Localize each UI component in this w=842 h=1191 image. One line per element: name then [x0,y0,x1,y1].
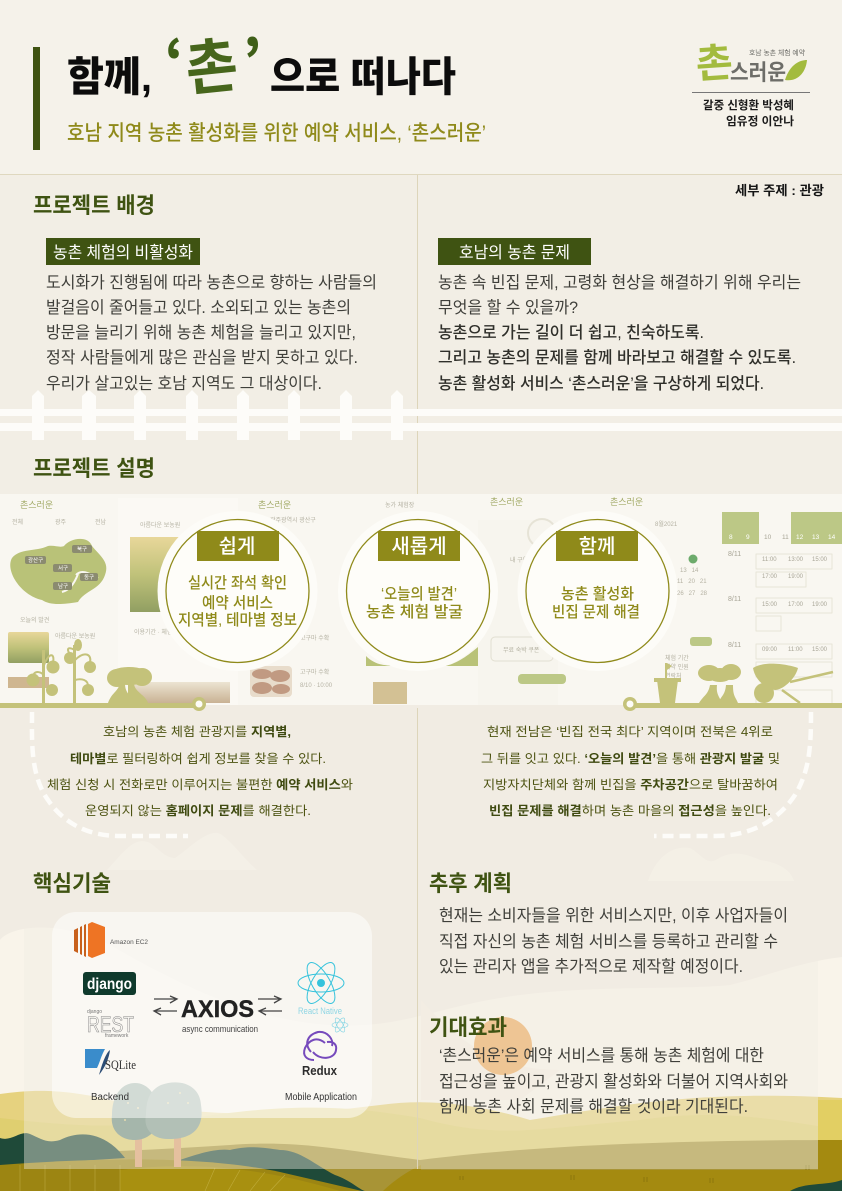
panel: future plans [429,871,788,976]
calendar header: 12 [796,534,804,541]
panel: app screenshots strip: 11:00 [788,647,803,653]
circle: new: 농촌 체험 발굴 [366,603,463,621]
panel: expected effects [429,1015,788,1116]
panel: app screenshots strip: 내 구역 [510,556,528,564]
logo: axios [181,996,258,1035]
header accent bar [33,47,40,150]
circle: new: ‘오늘의 발견’ [381,585,457,603]
text: revival description: 그 뒤를 잇고 있다. ‘오늘의 발견’ 을 통해 관광지 발굴 및 [481,752,780,766]
icon: django [83,972,136,995]
panel: app screenshots strip: 15:00 [812,557,828,563]
panel: app screenshots strip: 17:00 [788,602,804,608]
tag: honam problems [438,238,591,265]
logo and team: 갈중 신형환 박성혜 [703,98,794,112]
tag: rural experience: 농촌 체험의 비활성화 [53,243,193,262]
text: future plans [439,906,788,976]
panel: tech stack [52,912,372,1118]
panel: app screenshots strip: 무료 숙박 쿠폰 [503,646,540,654]
panel: app screenshots strip: 전남 [95,518,107,526]
text: easy description [47,725,354,818]
panel: app screenshots strip: 연락처 [665,672,682,680]
landscape scenery [0,833,842,1191]
photo thumbnails [8,537,478,704]
icon: django rest [87,1009,134,1039]
circle: easy: 실시간 좌석 확인 [188,574,287,592]
plant silhouette [26,639,96,703]
map of districts: 북구 [77,546,87,553]
divider lines [417,175,418,1169]
calendar header: 11 [782,534,789,541]
panel: app screenshots strip: 15:00 [762,602,778,608]
panel: app screenshots strip: 예약 인원 [665,663,689,671]
text: honam problems: 무엇을 할 수 있을까? [438,298,578,317]
logo and team: 촌 [694,41,734,87]
calendar header: 9 [746,534,750,541]
logo: axios: async communication [182,1024,258,1035]
calendar header [722,512,842,544]
text: future plans: 현재는 소비자들을 위한 서비스지만, 이후 사업자들이 [439,906,788,925]
text: future plans: 있는 관리자 앱을 추가적으로 제작할 예정이다. [439,957,743,976]
map of districts [10,539,106,604]
calendar header: 14 [828,534,836,541]
logo and team: 임유정 이안나 [726,114,794,128]
heading: project background: 프로젝트 배경 [33,193,155,218]
logo and team: 호남 농촌 체험 예약 [749,48,806,57]
wheelbarrow silhouette [753,664,833,703]
tag: honam problems: 호남의 농촌 문제 [459,243,570,262]
arrows left [154,996,177,1015]
panel: app screenshots strip: 13 14 [680,568,699,574]
circle: new [338,511,498,671]
panel: app screenshots strip: 광주광역시 광산구 [270,516,316,524]
icon: react native: React Native [298,1006,342,1016]
panel: app screenshots strip: 오늘의 발견 [20,616,49,624]
text: expected effects [439,1046,788,1116]
panel: app screenshots strip: 8/11 [728,642,741,649]
panel: app screenshots strip: 아름다운 보농원 [55,632,95,640]
text: rural experience: 우리가 살고있는 호남 지역도 그 대상이다. [46,374,322,393]
icon: sqlite [85,1049,136,1075]
icon: amazon ec2 [74,922,148,958]
text: honam problems [438,273,801,393]
panel: app screenshots strip: 광주 [55,519,67,526]
panel: app screenshots strip: 11 20 21 [677,579,707,585]
text: rural experience: 방문을 늘리기 위해 농촌 체험을 늘리고 있지만, [46,323,356,342]
circle: easy: 예약 서비스 [202,594,273,612]
title: 으로 떠나다 [270,54,456,100]
text: revival description [481,725,780,818]
icon: django rest: framework [105,1033,129,1039]
fence [0,390,842,440]
panel: app screenshots strip: 촌스러운 [490,497,523,507]
timeline bar with plants [0,639,842,708]
tag: rural experience [46,238,200,265]
timeline nodes [192,697,637,711]
icon: django rest: django [87,1009,102,1015]
panel: app screenshots strip: 15:00 [812,647,828,653]
label: backend: Backend [91,1092,129,1103]
panel: app screenshots strip: 농가 체험장 [385,501,415,509]
vegetables silhouette [698,664,741,703]
panel: app screenshots strip: 체험 기간 [665,654,689,662]
panel: app screenshots strip: 26 27 28 [677,591,708,597]
circle: together: 함께 [579,535,615,558]
dashed path left [32,712,188,836]
heading: future plans: 추후 계획 [429,871,512,896]
panel: app screenshots strip: 이용기간 · 체험 정보 [134,628,186,636]
text: honam problems: 그리고 농촌의 문제를 함께 바라보고 해결할 수 있도록. [438,348,796,367]
text: revival description: 현재 전남은 ‘빈집 전국 최다’ 지역이며 전북은 4위로 [487,725,773,739]
heading: core tech: 핵심기술 [33,871,111,896]
label: mobile application: Mobile Application [285,1092,357,1103]
circle: easy: 지역별, 테마별 정보 [178,611,297,629]
text: easy description: 체험 신청 시 전화로만 이루어지는 불편한 예약 서비스 와 [47,778,354,792]
title: ’ [243,18,261,93]
text: expected effects: 함께 농촌 사회 문제를 해결할 것이라 기대된다. [439,1097,748,1116]
panel: honam rural problems [438,238,801,393]
text: revival description: 빈집 문제를 해결 하며 농촌 마을의 접근성을 높인다. [489,803,771,818]
heading: project description: 프로젝트 설명 [33,456,155,481]
panel: app screenshots strip: 촌스러운 [258,500,291,510]
icon: sqlite: SQLite [105,1057,136,1072]
panel: app screenshots strip: 13:00 [788,557,804,563]
panel: app screenshots strip: 8/11 [728,596,741,603]
text: honam problems: 농촌 속 빈집 문제, 고령화 현상을 해결하기 위해 우리는 [438,273,801,292]
arrows right [258,996,282,1015]
panel: app screenshots strip: 아름다운 보농원 [140,521,180,529]
panel: app screenshots strip: 8/11 [728,551,741,558]
circle: together [518,511,678,671]
title: ‘ [165,18,183,93]
title [67,18,456,104]
panel: rural experience [46,238,377,393]
circle: new: 새롭게 [391,535,447,558]
icon: django rest: REST [87,1012,134,1037]
panel: app screenshots strip: 17:00 [762,574,778,580]
dashed path right [654,712,811,836]
logo: axios: AXIOS [181,996,254,1023]
circle: together: 빈집 문제 해결 [552,603,640,621]
text: revival description: 지방자치단체와 함께 빈집을 주차공간으로 탈바꿈하여 [483,778,778,792]
circle: easy [158,511,318,671]
icon: django: django [87,976,132,993]
panel: app screenshots strip [0,494,842,705]
panel: app screenshots strip: 촌스러운 [610,497,643,507]
flower pot silhouette [654,663,681,703]
calendar header: 10 [764,534,772,541]
icon: redux: Redux [302,1063,338,1078]
panel: app screenshots strip: 19:00 [812,602,828,608]
panel: app screenshots strip: 8/10 · 10:00 [300,683,333,689]
panel: app screenshots strip: 전체 [12,518,23,526]
text: rural experience [46,273,377,393]
text: rural experience: 발걸음이 줄어들고 있다. 소외되고 있는 농촌의 [46,298,351,317]
panel: app screenshots strip: 8월2021 [655,520,678,528]
panel: app screenshots strip: 11:00 [762,557,777,563]
text: rural experience: 도시화가 진행됨에 따라 농촌으로 향하는 사람들의 [46,273,377,292]
text: honam problems: 농촌 활성화 서비스 ‘촌스러운’을 구상하게 되었다. [438,374,764,393]
map of districts: 서구 [58,564,68,572]
map of districts: 남구 [58,582,68,590]
map of districts: 광산구 [28,556,43,564]
trees [112,1082,202,1167]
text: easy description: 호남의 농촌 체험 관광지를 지역별, [103,725,291,739]
circle: easy: 쉽게 [219,535,255,558]
text: expected effects: 접근성을 높이고, 관광지 활성화와 더불어 지역사회와 [439,1072,788,1091]
text: future plans: 직접 자신의 농촌 체험 서비스를 등록하고 관리할 수 [439,932,778,951]
map of districts: 동구 [84,574,94,581]
text: rural experience: 정작 사람들에게 많은 관심을 받지 못하고 있다. [46,348,358,367]
panel: app screenshots strip: 고구마 수확 [300,668,330,676]
panel: app screenshots strip: 19:00 [788,574,804,580]
text: expected effects: ‘촌스러운’은 예약 서비스를 통해 농촌 체험에 대한 [439,1046,764,1065]
panel: app screenshots strip: 촌스러운 [20,500,53,510]
icon: redux [302,1032,338,1078]
panel: app screenshots strip: 고구마 수확 [300,634,330,642]
bush silhouette [107,667,152,703]
panel: app screenshots strip: 09:00 [762,647,778,653]
logo and team: 스러운 [730,60,786,85]
text: easy description: 테마별로 필터링하여 쉽게 정보를 찾을 수 있다. [70,752,326,766]
text: easy description: 운영되지 않는 홈페이지 문제 를 해결한다. [85,803,311,818]
icon: react native [298,959,348,1033]
heading: expected effects: 기대효과 [429,1015,507,1040]
subject label: 세부 주제 : 관광 [735,183,824,198]
logo and team [692,41,810,128]
time slot grids [756,554,832,704]
subtitle: 호남 지역 농촌 활성화를 위한 예약 서비스, ‘촌스러운’ [67,122,486,145]
title: 함께, [67,54,152,100]
title: 촌 [182,31,241,104]
translucent content overlay [24,885,818,1169]
calendar header: 8 [729,534,733,541]
icon: amazon ec2: Amazon EC2 [110,939,148,946]
circle: together: 농촌 활성화 [561,585,634,603]
text: honam problems: 농촌으로 가는 길이 더 쉽고, 친숙하도록. [438,323,704,342]
calendar header: 13 [812,534,820,541]
